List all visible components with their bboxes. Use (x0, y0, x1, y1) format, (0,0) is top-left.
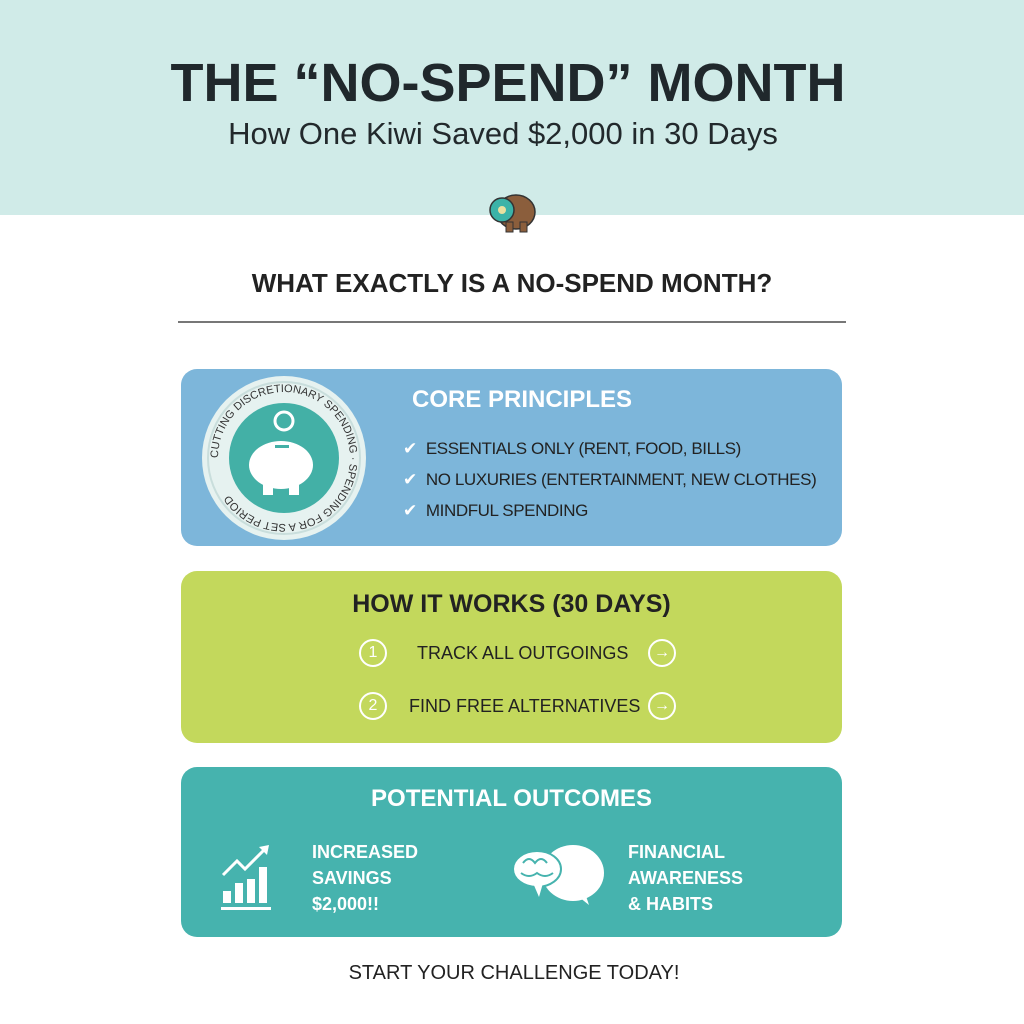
header band (0, 0, 1024, 215)
list: principles: ✔ ESSENTIALS ONLY (RENT, FOOD, BILLS) (403, 439, 741, 458)
text: financial awareness (628, 842, 743, 914)
icon: kiwi piggy (489, 194, 536, 232)
heading: outcomes: POTENTIAL OUTCOMES (371, 785, 652, 812)
panel: how it works (181, 571, 842, 743)
step 1: TRACK ALL OUTGOINGS (417, 643, 628, 663)
title: THE “NO-SPEND” MONTH (170, 53, 846, 113)
icon: growth chart (221, 845, 271, 910)
panel: core principles (181, 369, 842, 546)
text: increased savings: SAVINGS (312, 868, 392, 888)
step 2 (359, 692, 676, 720)
step 1: → (654, 644, 670, 661)
subtitle: How One Kiwi Saved $2,000 in 30 Days (228, 116, 778, 151)
list: principles: ✔ NO LUXURIES (ENTERTAINMENT, NEW CLOTHES) (403, 470, 816, 489)
list: principles: ✔ MINDFUL SPENDING (403, 501, 588, 520)
step 1 (359, 639, 676, 667)
heading: how it works: HOW IT WORKS (30 DAYS) (352, 590, 671, 618)
icon: brain speech bubble (514, 845, 604, 905)
text: increased savings: INCREASED (312, 842, 418, 862)
footer call to action: START YOUR CHALLENGE TODAY! (349, 962, 679, 984)
icon: piggy badge: CUTTING DISCRETIONARY SPENDING · SPENDING FOR A SET PERIOD (210, 384, 358, 532)
step 2: 2 (369, 697, 377, 714)
text: financial awareness: & HABITS (628, 894, 713, 914)
step 2: FIND FREE ALTERNATIVES (409, 696, 640, 716)
text: increased savings (312, 842, 418, 914)
section heading: WHAT EXACTLY IS A NO-SPEND MONTH? (252, 268, 772, 298)
text: increased savings: $2,000!! (312, 894, 379, 914)
heading: core principles: CORE PRINCIPLES (412, 386, 632, 413)
list: principles (403, 439, 816, 520)
step 2: → (654, 697, 670, 714)
text: financial awareness: AWARENESS (628, 868, 743, 888)
text: financial awareness: FINANCIAL (628, 842, 725, 862)
panel: potential outcomes (181, 767, 842, 937)
step 1: 1 (369, 644, 377, 661)
